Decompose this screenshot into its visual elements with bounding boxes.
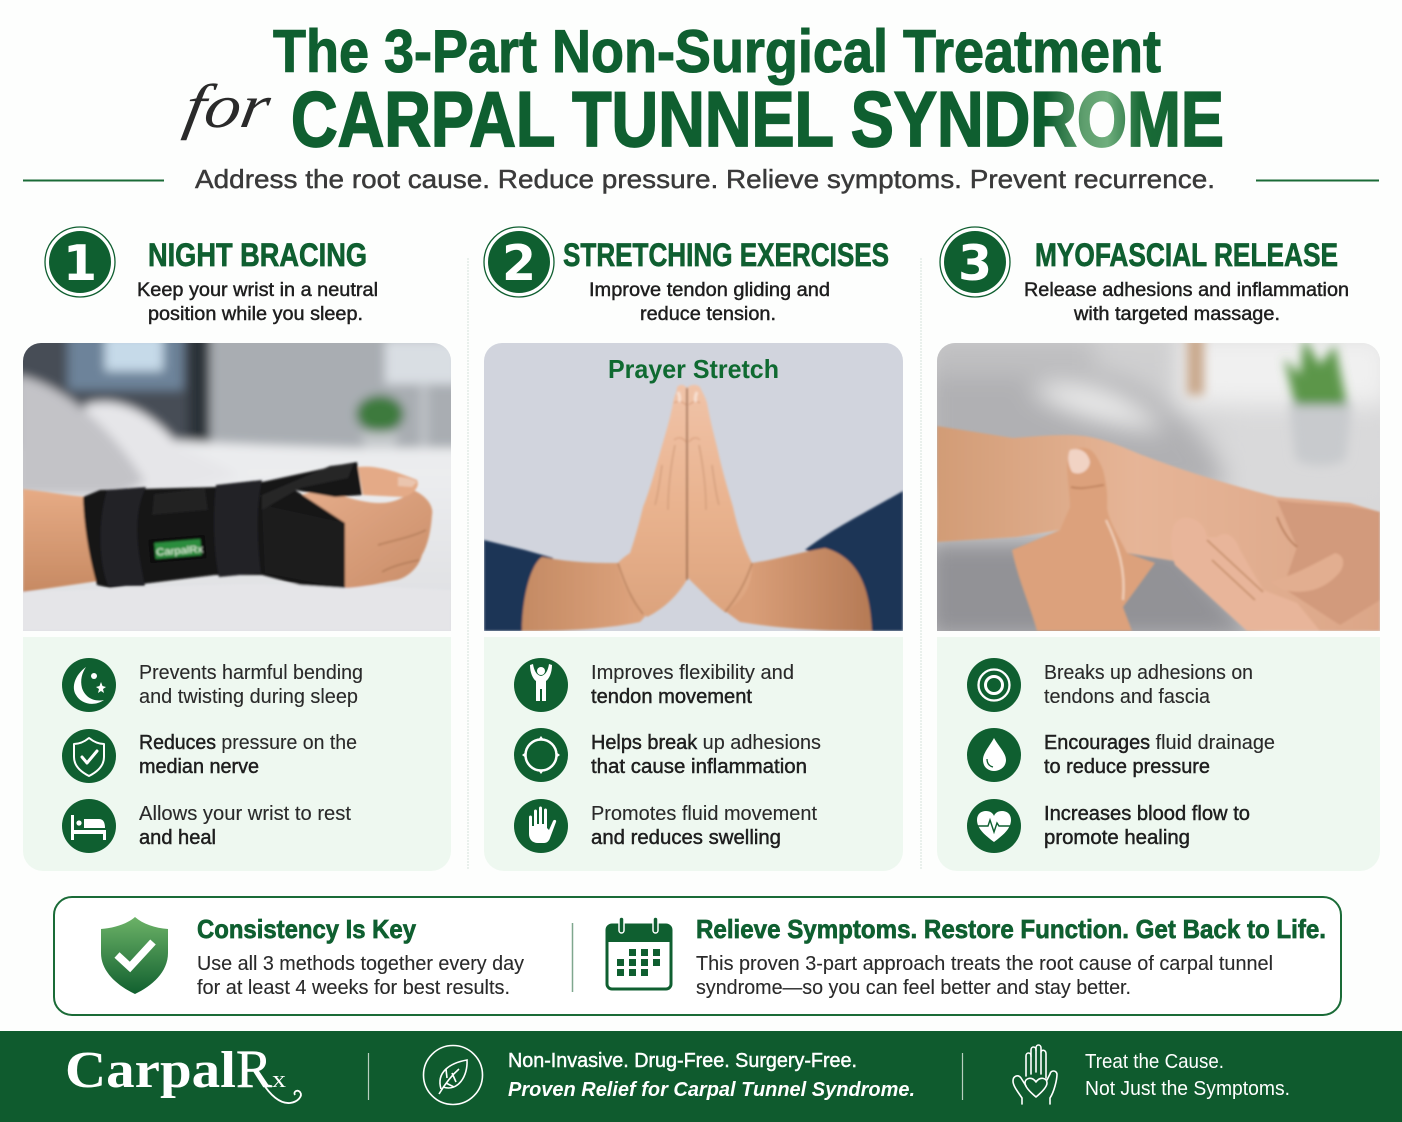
icon: moon bbox=[62, 658, 116, 712]
benefits panel 1 bbox=[23, 637, 451, 871]
description: reduce tension. bbox=[640, 303, 776, 325]
icon: heart pulse bbox=[967, 799, 1021, 853]
label: prayer stretch: Prayer Stretch bbox=[608, 354, 779, 384]
title bbox=[180, 18, 1224, 163]
benefit text: Prevents harmful bending bbox=[139, 662, 363, 684]
bed shade bbox=[23, 581, 371, 593]
title: CARPAL TUNNEL SYNDROME bbox=[291, 75, 1224, 163]
benefit text: tendons and fascia bbox=[1044, 686, 1211, 708]
benefit text bbox=[1044, 732, 1275, 778]
sleeves bbox=[484, 540, 553, 631]
right arm bbox=[710, 548, 872, 631]
benefit text: promote healing bbox=[1044, 827, 1190, 849]
subtitle with side rules: Address the root cause. Reduce pressure. Relieve symptoms. Prevent recurrence. bbox=[195, 164, 1215, 194]
description: Release adhesions and inflammation bbox=[1024, 279, 1349, 301]
left hand and thumb bbox=[1012, 448, 1155, 631]
number badge 3: 3 bbox=[958, 235, 992, 292]
benefit text: and twisting during sleep bbox=[139, 686, 358, 708]
benefit text: median nerve bbox=[139, 756, 259, 778]
number badge 1 bbox=[45, 227, 115, 297]
consistency text bbox=[197, 914, 524, 999]
logo: CarpalRx: R bbox=[236, 1039, 272, 1099]
number badge 2: 2 bbox=[502, 235, 536, 292]
footer message bbox=[508, 1050, 915, 1101]
relieve symptoms text bbox=[696, 914, 1326, 999]
icon: green shield with check bbox=[101, 917, 168, 994]
description bbox=[1024, 279, 1349, 325]
benefit text: to reduce pressure bbox=[1044, 756, 1210, 778]
benefit text: Allows your wrist to rest bbox=[139, 803, 351, 825]
consistency text: Use all 3 methods together every day bbox=[197, 953, 524, 975]
benefit text: and heal bbox=[139, 827, 216, 849]
number badge 1: 1 bbox=[63, 235, 97, 292]
icon: shield bbox=[62, 729, 116, 783]
brand tag bbox=[148, 535, 207, 563]
footer message: Non-Invasive. Drug-Free. Surgery-Free. bbox=[508, 1050, 857, 1072]
brand tag: CarpalRx bbox=[156, 544, 203, 558]
icon: target bbox=[967, 658, 1021, 712]
footer band bbox=[0, 1031, 1402, 1122]
consistency text: for at least 4 weeks for best results. bbox=[197, 977, 510, 999]
relieve symptoms text: Relieve Symptoms. Restore Function. Get Back to Life. bbox=[696, 914, 1326, 944]
footer message: Proven Relief for Carpal Tunnel Syndrome. bbox=[508, 1078, 915, 1101]
icon: open hand bbox=[514, 799, 568, 853]
icon: leaf in circle bbox=[424, 1046, 482, 1104]
benefit text: Reduces pressure on the bbox=[139, 732, 357, 754]
benefit text bbox=[139, 803, 351, 849]
logo: CarpalRx bbox=[65, 1039, 301, 1103]
benefit text bbox=[591, 803, 817, 849]
benefit text: Breaks up adhesions on bbox=[1044, 662, 1253, 684]
benefit text: Promotes fluid movement bbox=[591, 803, 817, 825]
benefit text: Encourages fluid drainage bbox=[1044, 732, 1275, 754]
forearm and right hand bbox=[937, 426, 1380, 631]
relieve symptoms text: syndrome—so you can feel better and stay better. bbox=[696, 977, 1131, 999]
photo: prayer stretch bbox=[484, 343, 904, 631]
callout box bbox=[54, 897, 1341, 1015]
benefit text: and reduces swelling bbox=[591, 827, 781, 849]
relieve symptoms text: This proven 3-part approach treats the root cause of carpal tunnel bbox=[696, 953, 1273, 975]
hand bbox=[293, 490, 432, 588]
icon: water drop bbox=[967, 728, 1021, 782]
heading: stretching exercises: STRETCHING EXERCISES bbox=[563, 237, 889, 273]
title: The 3-Part Non-Surgical Treatment bbox=[273, 18, 1161, 85]
benefit text: Helps break up adhesions bbox=[591, 732, 821, 754]
footer tagline: Not Just the Symptoms. bbox=[1085, 1078, 1290, 1100]
benefit text: Improves flexibility and bbox=[591, 662, 794, 684]
icon: bed bbox=[62, 799, 116, 853]
benefits panel 2 bbox=[484, 637, 903, 871]
palm bbox=[1277, 500, 1380, 625]
finger lines bbox=[686, 388, 688, 580]
heading: myofascial release: MYOFASCIAL RELEASE bbox=[1035, 237, 1338, 273]
brace body bbox=[83, 462, 362, 588]
column 1: night bracing bbox=[10, 227, 470, 871]
logo: CarpalRx: Carpal bbox=[65, 1042, 236, 1099]
benefit text bbox=[139, 732, 357, 778]
description: with targeted massage. bbox=[1073, 303, 1280, 325]
benefit text bbox=[591, 662, 794, 708]
straps bbox=[100, 487, 146, 586]
icon: person stretching bbox=[514, 658, 568, 712]
forearm bbox=[23, 489, 105, 592]
photo: massage on wrist bbox=[937, 343, 1380, 631]
description bbox=[137, 279, 378, 325]
left arm bbox=[522, 557, 660, 631]
description: position while you sleep. bbox=[148, 303, 363, 325]
benefit text: Increases blood flow to bbox=[1044, 803, 1250, 825]
footer tagline bbox=[1085, 1051, 1290, 1100]
benefit text bbox=[591, 732, 821, 778]
benefit text bbox=[1044, 662, 1253, 708]
benefits panel 3 bbox=[937, 637, 1380, 871]
description: Improve tendon gliding and bbox=[589, 279, 830, 301]
column 3: myofascial release bbox=[925, 227, 1395, 871]
number badge 3 bbox=[940, 227, 1010, 297]
icon: calendar bbox=[607, 917, 671, 989]
footer tagline: Treat the Cause. bbox=[1085, 1051, 1224, 1073]
description: Keep your wrist in a neutral bbox=[137, 279, 378, 301]
benefit text: tendon movement bbox=[591, 686, 752, 708]
photo: wrist brace on bed bbox=[23, 343, 451, 631]
fingers bbox=[1173, 536, 1318, 630]
title: for bbox=[180, 71, 277, 141]
hands bbox=[618, 385, 752, 617]
benefit text bbox=[139, 662, 363, 708]
description bbox=[589, 279, 830, 325]
column 2: stretching exercises bbox=[484, 227, 904, 871]
logo: CarpalRx: x bbox=[272, 1067, 286, 1093]
icon: hand with heart bbox=[1013, 1045, 1057, 1104]
number badge 2 bbox=[484, 227, 554, 297]
icon: circular arrows bbox=[514, 728, 568, 782]
benefit text bbox=[1044, 803, 1250, 849]
benefit text: that cause inflammation bbox=[591, 756, 807, 778]
consistency text: Consistency Is Key bbox=[197, 914, 416, 944]
heading: night bracing: NIGHT BRACING bbox=[148, 237, 367, 273]
